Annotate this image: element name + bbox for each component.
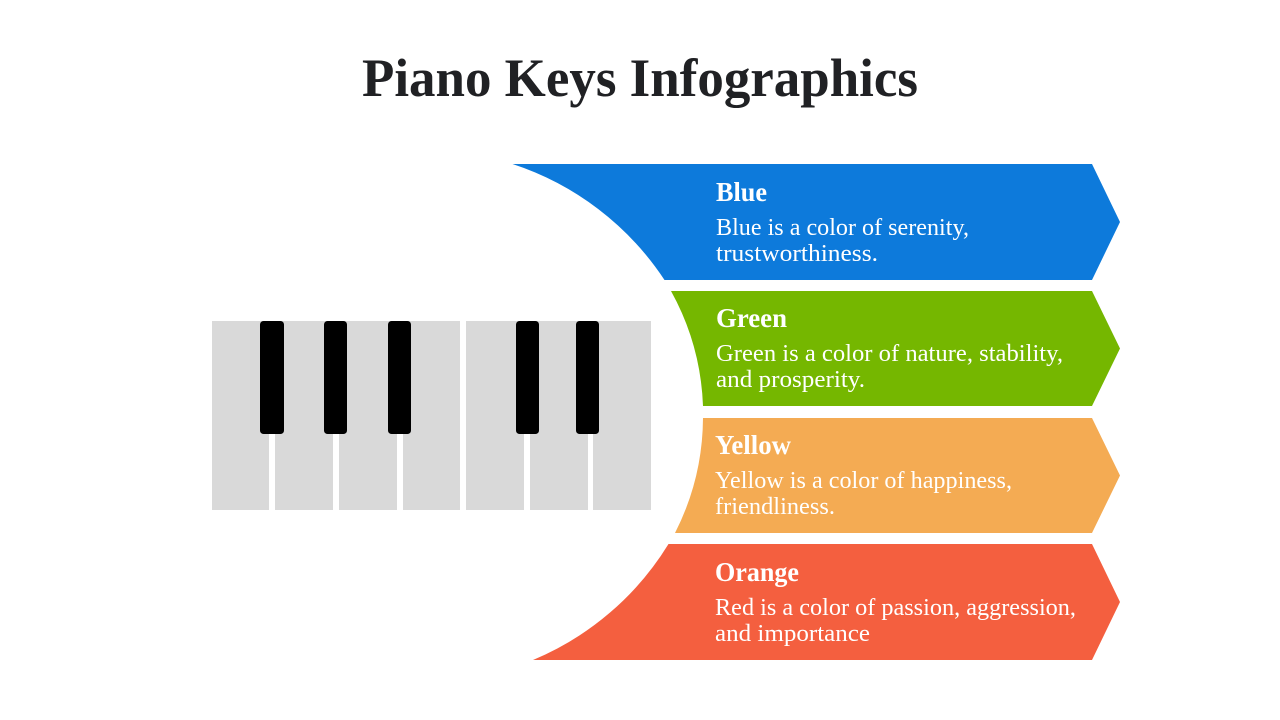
green description: and prosperity. xyxy=(716,367,865,393)
orange description xyxy=(715,595,1076,647)
piano keyboard xyxy=(212,321,651,510)
white keys xyxy=(212,321,651,510)
orange description: Red is a color of passion, aggression, xyxy=(715,595,1076,621)
green heading: Green xyxy=(716,303,787,333)
yellow description: Yellow is a color of happiness, xyxy=(715,468,1012,494)
blue description: trustworthiness. xyxy=(716,241,878,267)
orange description: and importance xyxy=(715,621,870,647)
yellow heading: Yellow xyxy=(715,430,791,460)
blue arrow shape xyxy=(512,164,1120,280)
blue description: Blue is a color of serenity, xyxy=(716,215,969,241)
panel: yellow xyxy=(675,418,1120,533)
yellow description: friendliness. xyxy=(715,494,835,520)
panel: orange xyxy=(533,544,1120,660)
green description xyxy=(716,341,1063,393)
panel: green xyxy=(671,291,1120,406)
black keys xyxy=(260,321,599,434)
blue description xyxy=(716,215,969,267)
yellow arrow shape xyxy=(675,418,1120,533)
yellow description xyxy=(715,468,1012,520)
title: Piano Keys Infographics xyxy=(362,48,918,108)
blue heading: Blue xyxy=(716,177,767,207)
green arrow shape xyxy=(671,291,1120,406)
orange heading: Orange xyxy=(715,557,799,587)
orange arrow shape xyxy=(533,544,1120,660)
panel: blue xyxy=(512,164,1120,280)
green description: Green is a color of nature, stability, xyxy=(716,341,1063,367)
